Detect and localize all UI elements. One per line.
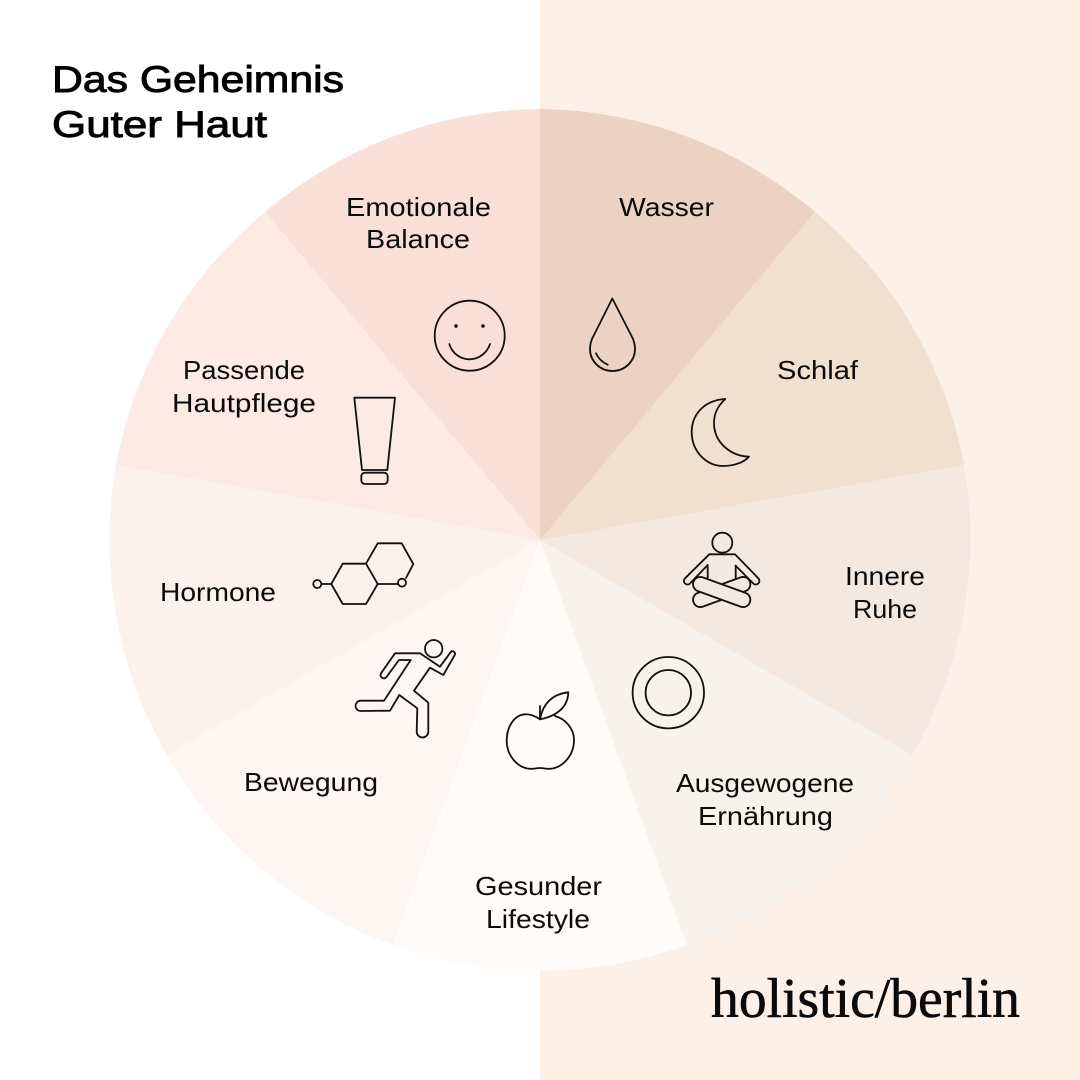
label: Emotionale Balance: Emotionale <box>346 192 491 222</box>
icon: apple <box>507 692 574 769</box>
label: Gesunder Lifestyle: Gesunder <box>475 871 602 901</box>
wedge: Innere Ruhe <box>540 465 970 755</box>
wedge: Schlaf <box>540 212 964 540</box>
label: Schlaf: Schlaf <box>777 355 859 385</box>
title: Guter Haut <box>52 104 268 145</box>
icon: runner <box>356 640 455 737</box>
wedge: Emotionale Balance <box>265 109 540 540</box>
icon: molecule <box>313 543 413 604</box>
pie wheel <box>109 109 970 971</box>
label: Passende Hautpflege: Passende <box>183 355 305 385</box>
label: Ausgewogene Ernährung: Ernährung <box>698 801 833 831</box>
wedge: Lifestyle <box>393 540 687 971</box>
wedge: Hautpflege <box>116 212 540 540</box>
label: Emotionale Balance: Balance <box>366 224 470 254</box>
label: Ausgewogene Ernährung: Ausgewogene <box>676 768 854 798</box>
label: Gesunder Lifestyle: Lifestyle <box>486 904 590 934</box>
icon: meditating person <box>684 533 759 609</box>
label: Wasser: Wasser <box>619 192 714 222</box>
icon: moon <box>692 399 749 466</box>
icon: tube <box>354 398 395 484</box>
label: Bewegung: Bewegung <box>244 767 378 797</box>
wedge: Ernährung <box>540 540 912 945</box>
wedge: Hormone <box>109 465 540 755</box>
wedge: Wasser <box>540 109 815 540</box>
background: right beige half <box>540 0 1080 1080</box>
label: Innere Ruhe: Ruhe <box>853 594 917 624</box>
icon: plate <box>633 657 704 728</box>
logo: holistic/berlin <box>711 968 1020 1030</box>
label: Passende Hautpflege: Hautpflege <box>172 388 316 418</box>
wedge: Bewegung <box>167 540 540 945</box>
label: Innere Ruhe: Innere <box>845 561 925 591</box>
icon: smiley <box>435 301 505 371</box>
title: Das Geheimnis <box>52 59 344 100</box>
icon: water drop <box>590 298 635 371</box>
label: Hormone: Hormone <box>160 577 276 607</box>
